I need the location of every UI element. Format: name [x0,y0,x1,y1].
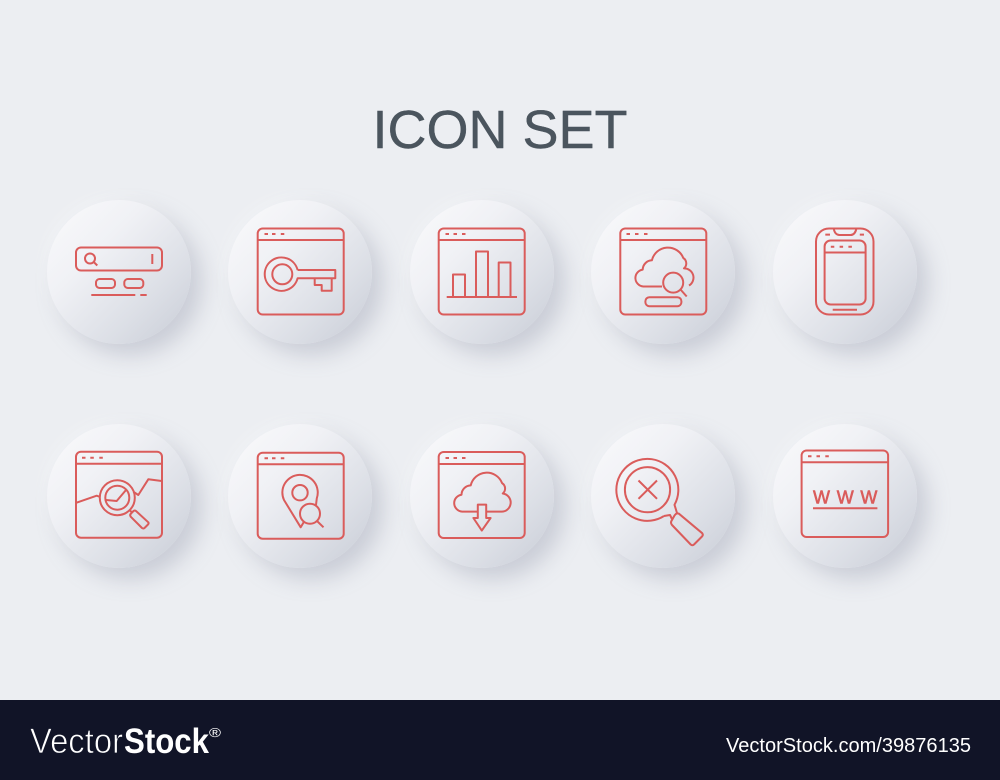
VectorStock logo: Vector [30,722,123,761]
panel: browser with magnifier on chart icon [47,424,191,568]
panel: browser with location search icon [228,424,372,568]
title: ICON SET [372,100,628,160]
panel: browser with bar chart icon [410,200,554,344]
panel: browser with cloud download icon [410,424,554,568]
VectorStock logo [30,722,222,761]
VectorStock logo: Stock [124,722,209,761]
panel: browser with www icon: WWW [813,488,877,508]
panel: browser with key icon [228,200,372,344]
VectorStock logo: ® [209,725,222,740]
panel: search bar icon [47,200,191,344]
panel: browser with www icon [773,424,917,568]
image id text: VectorStock.com/39876135 [726,735,971,757]
panel: browser with cloud search icon [591,200,735,344]
panel: magnifier with cross icon [591,424,735,568]
panel: smartphone icon [773,200,917,344]
footer bar [0,700,1000,780]
